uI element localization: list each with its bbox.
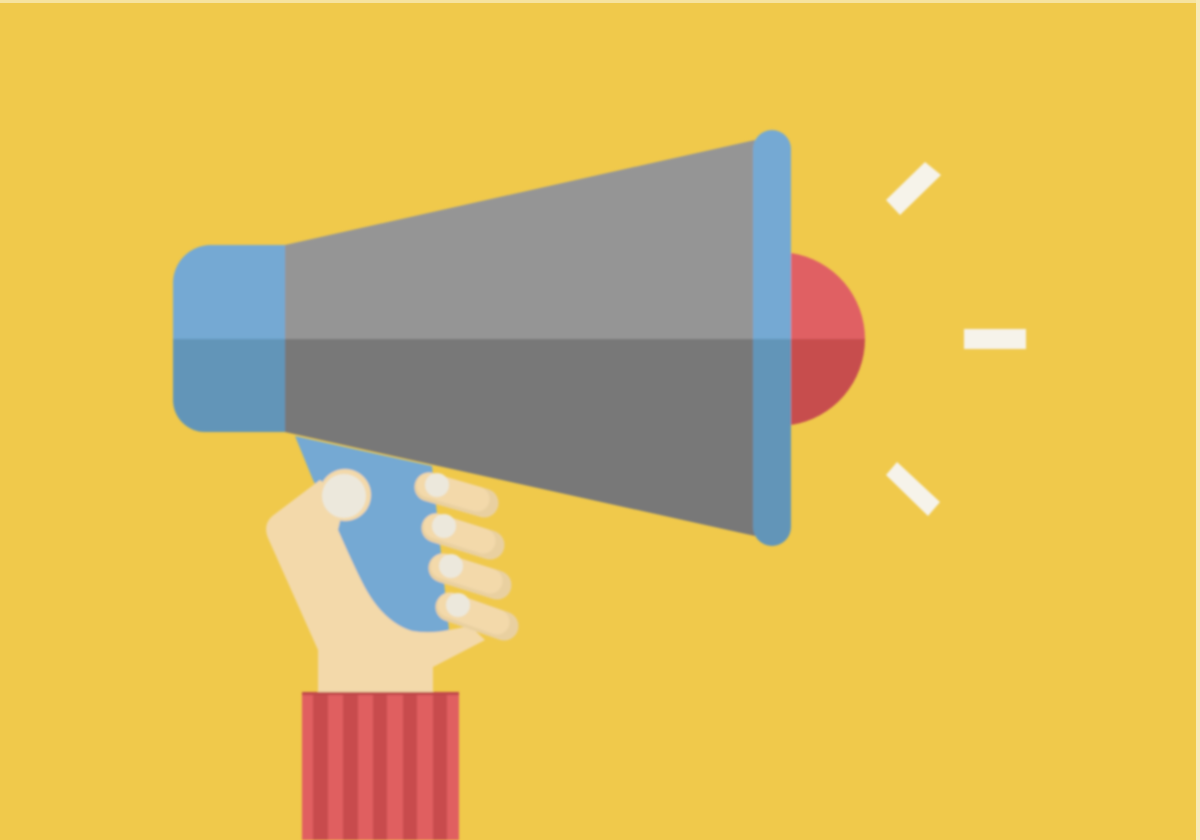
- hand: [266, 469, 504, 692]
- finger 4: [446, 593, 504, 626]
- ray: bottom: [886, 462, 940, 516]
- thumb nail: [319, 469, 371, 521]
- sound rays: [886, 162, 1026, 516]
- blue front rim: [753, 130, 791, 546]
- handle: [295, 436, 449, 632]
- megaphone cone: [285, 140, 755, 536]
- finger 1: [425, 473, 484, 503]
- ray: middle: [964, 329, 1026, 349]
- finger 3: [439, 554, 497, 585]
- finger 2: [432, 514, 490, 545]
- ray: top: [886, 162, 941, 215]
- red striped sleeve: [302, 692, 459, 840]
- red speaker dome: [791, 253, 865, 425]
- blue rear cap: [173, 245, 285, 432]
- palm and wrist: [266, 480, 485, 692]
- megaphone illustration: [173, 130, 1026, 840]
